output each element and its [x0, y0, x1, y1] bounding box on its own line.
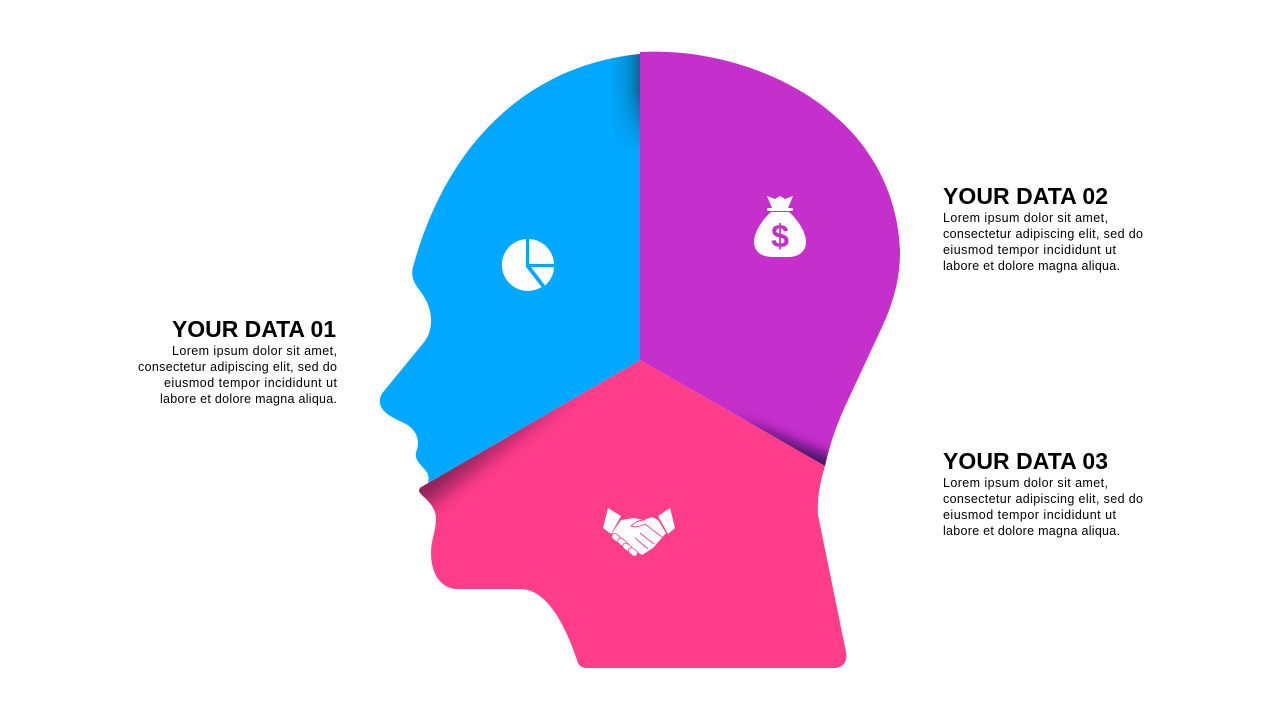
head infographic — [380, 40, 900, 668]
body text 03: labore et dolore magna aliqua. — [943, 524, 1120, 538]
heading: your data 02: YOUR DATA 02 — [943, 183, 1108, 209]
infographic canvas — [138, 52, 1142, 668]
icon: handshake — [603, 508, 675, 558]
body text 02: consectetur adipiscing elit, sed do — [943, 227, 1143, 241]
body text 01: consectetur adipiscing elit, sed do — [138, 360, 337, 374]
icon: money bag: $ — [771, 218, 789, 254]
body text 01 — [138, 344, 338, 406]
body text 02: labore et dolore magna aliqua. — [943, 259, 1120, 273]
heading: your data 01: YOUR DATA 01 — [172, 316, 336, 342]
panel: blue face segment — [380, 40, 640, 483]
body text 01: Lorem ipsum dolor sit amet, — [172, 344, 337, 358]
body text 01: labore et dolore magna aliqua. — [160, 392, 337, 406]
panel: pink jaw and neck segment — [405, 360, 846, 668]
body text 03 — [943, 476, 1143, 538]
text block: your data 03 — [943, 448, 1143, 538]
body text 02: eiusmod tempor incididunt ut — [943, 243, 1117, 257]
body text 03: eiusmod tempor incididunt ut — [943, 508, 1117, 522]
body text 03: consectetur adipiscing elit, sed do — [943, 492, 1143, 506]
icon: pie chart — [502, 239, 554, 291]
body text 02: Lorem ipsum dolor sit amet, — [943, 211, 1108, 225]
text block: your data 02 — [943, 183, 1143, 273]
body text 01: eiusmod tempor incididunt ut — [164, 376, 338, 390]
heading: your data 03: YOUR DATA 03 — [943, 448, 1108, 474]
body text 03: Lorem ipsum dolor sit amet, — [943, 476, 1108, 490]
text block: your data 01 — [138, 316, 338, 406]
icon: money bag — [754, 196, 806, 257]
panel: purple skull segment — [640, 52, 900, 490]
body text 02 — [943, 211, 1143, 273]
